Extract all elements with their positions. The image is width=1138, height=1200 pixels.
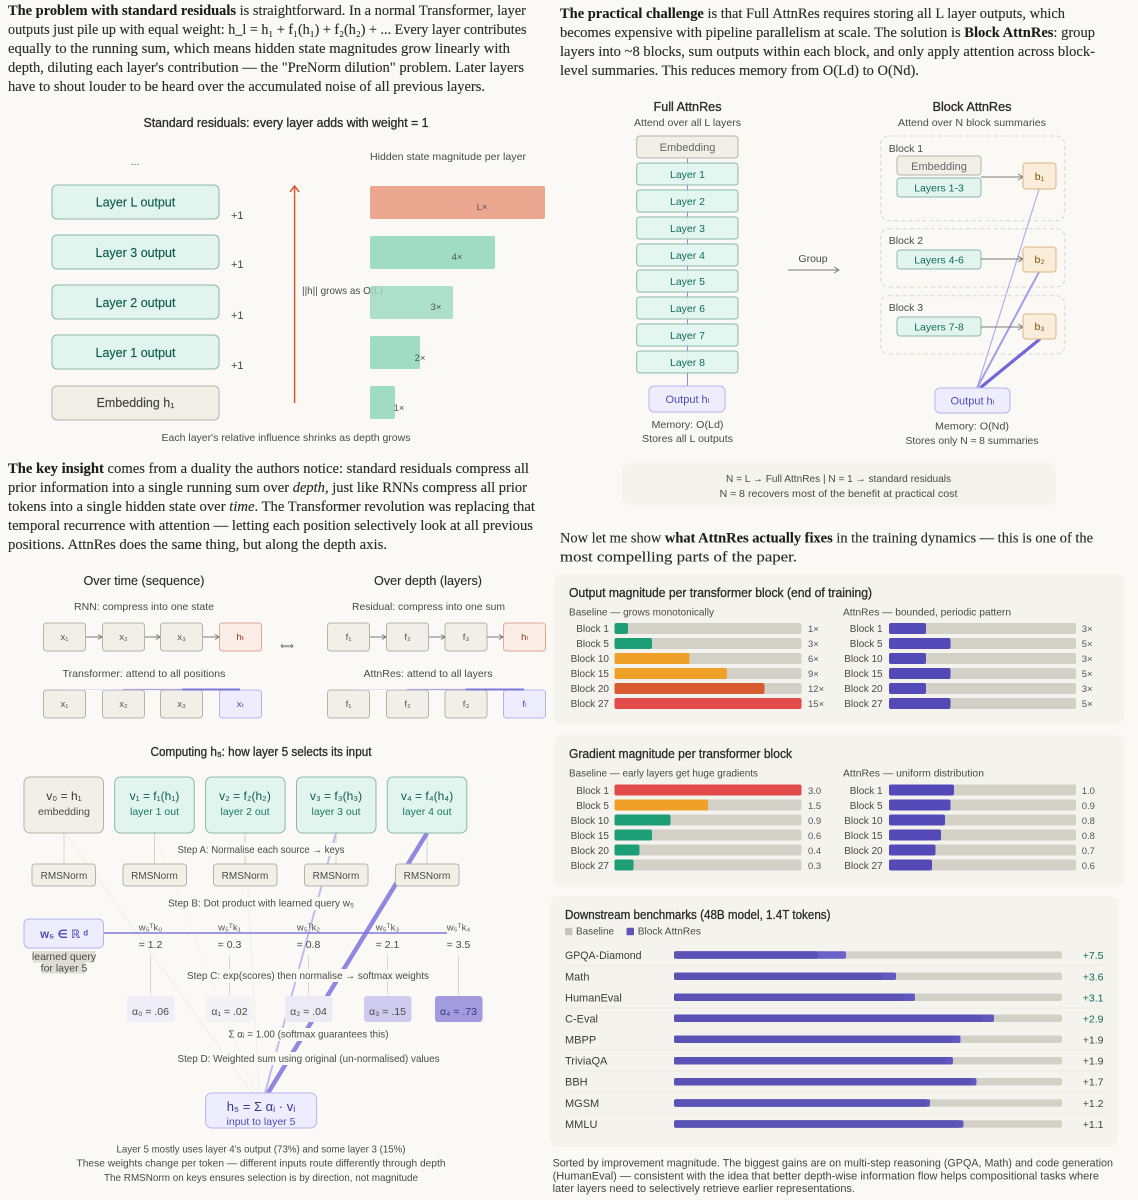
layer column: Layer 2 — [670, 196, 705, 208]
legend — [565, 926, 701, 938]
arrow: growth — [290, 186, 299, 403]
bar chart: attnres output: 5× — [1082, 639, 1093, 650]
text block: practical challenge: The practical challenge is that Full AttnRes requires storing all L layer outputs, which — [560, 6, 1066, 22]
attention lines — [977, 189, 1040, 388]
bar chart: benchmark rows: Math — [565, 971, 589, 983]
softmax weights: α₃ = .15 — [369, 1006, 406, 1018]
text block: benchmark commentary — [553, 1158, 1113, 1195]
dot product scores: w₅ᵀk₃ — [375, 922, 399, 934]
bar chart: attnres gradient: 1.0 — [1082, 786, 1095, 797]
source boxes — [24, 777, 467, 833]
dot product scores: = 3.5 — [447, 939, 470, 951]
bar chart: attnres gradient: Block 10 — [844, 816, 883, 827]
layer column: Embedding — [660, 142, 715, 154]
block labels: Block 3 — [889, 302, 923, 314]
block contents: Embedding — [911, 161, 967, 173]
bar chart: benchmark rows: GPQA-Diamond — [565, 950, 642, 962]
bar chart: baseline output: 12× — [808, 684, 824, 695]
text block: problem with standard residuals: have to shout louder to be heard over the accumulated noise of all previous layers. — [8, 79, 485, 95]
bar chart: magnitude: 1× — [394, 403, 404, 414]
RNN row: RNN: compress into one state — [74, 601, 214, 613]
dot product scores: = 2.1 — [376, 939, 399, 951]
heading: computing h5: Computing h₅: how layer 5 selects its input — [150, 745, 372, 759]
RMSNorm boxes: RMSNorm — [313, 871, 359, 882]
text block: key insight — [8, 461, 535, 553]
panel: gradient magnitude — [554, 735, 1124, 887]
panel: over time vs over depth — [44, 574, 546, 718]
bar chart: attnres output — [844, 623, 1093, 710]
layer stack — [52, 185, 219, 420]
attnres row: AttnRes: attend to all layers — [364, 668, 492, 680]
softmax weights: α₀ = .06 — [132, 1006, 169, 1018]
source boxes: embedding — [38, 806, 90, 818]
block labels: Block 2 — [889, 235, 923, 247]
panel: downstream benchmarks — [550, 896, 1118, 1147]
dot product scores: w₅ᵀk₁ — [217, 922, 241, 934]
layer stack: Layer 1 output — [96, 346, 176, 360]
bar chart: attnres gradient — [844, 784, 1095, 872]
step D label: Step D: Weighted sum using original (un-normalised) values — [178, 1053, 440, 1065]
transformer row: xₜ — [237, 699, 244, 710]
RMSNorm boxes: RMSNorm — [222, 871, 268, 882]
bar chart: attnres gradient: Block 1 — [850, 786, 883, 797]
ellipsis: ... — [131, 156, 139, 168]
layer column: Layer 4 — [670, 250, 705, 262]
weight labels: +1 — [231, 210, 244, 222]
bar chart: attnres output: Block 5 — [850, 639, 883, 650]
legend: Block AttnRes — [638, 926, 701, 938]
bar chart: baseline gradient: Block 15 — [571, 831, 609, 842]
text block: key insight: The key insight comes from a duality the authors notice: standard residuals compress all — [8, 461, 529, 477]
summary arrows — [981, 174, 1023, 330]
layer column: Layer 7 — [670, 330, 705, 342]
output box: Output hₗ — [950, 396, 995, 408]
text block: practical challenge: becomes expensive with pipeline parallelism at scale. The solution is Block AttnRes: group — [560, 25, 1095, 41]
bar chart: baseline gradient: 0.6 — [808, 831, 821, 842]
summary boxes: b₂ — [1035, 254, 1044, 266]
text block: practical challenge: layers into ~8 blocks, sum outputs within each block, and only apply attention across block- — [560, 44, 1095, 60]
callout: N trade-off: N = L → Full AttnRes | N = 1 → standard residuals — [726, 473, 951, 485]
text block: benchmark commentary: later layers need to selectively retrieve earlier representations. — [553, 1183, 855, 1195]
memory note: Memory: O(Ld) — [652, 419, 724, 431]
bar chart: baseline gradient: Block 27 — [571, 861, 609, 872]
transformer row — [44, 668, 262, 718]
subheading: attnres: AttnRes — bounded, periodic pattern — [843, 606, 1011, 618]
source boxes: layer 4 out — [402, 806, 452, 818]
dot product scores — [138, 922, 470, 951]
heading: full attnres: Full AttnRes — [654, 100, 722, 114]
bar chart: benchmark rows: BBH — [565, 1077, 588, 1089]
learned query box: learned query — [32, 951, 97, 963]
weight labels: +1 — [231, 259, 244, 271]
summary boxes: b₃ — [1034, 321, 1045, 333]
learned query box: w₅ ∈ ℝ ᵈ — [39, 929, 88, 941]
softmax weights — [127, 996, 482, 1022]
heading: output magnitude: Output magnitude per transformer block (end of training) — [569, 586, 872, 600]
bar chart: magnitude: 4× — [452, 252, 462, 263]
source boxes: v₄ = f₄(h₄) — [401, 789, 453, 803]
bar chart: baseline gradient: 3.0 — [808, 786, 821, 797]
bar chart: baseline output: Block 27 — [571, 699, 609, 710]
block contents — [897, 156, 981, 336]
text block: problem with standard residuals: depth, diluting each layer's contribution — the "PreNorm dilution" problem. Later layers — [8, 60, 524, 76]
bar chart: benchmark rows: +7.5 — [1083, 950, 1104, 962]
bar chart: baseline output: Block 1 — [576, 624, 609, 635]
bar chart: baseline output: Block 20 — [571, 684, 609, 695]
bar chart: benchmark rows: +1.2 — [1083, 1098, 1104, 1110]
bar chart: baseline gradient: 0.3 — [808, 861, 821, 872]
subheading: Attend over all L layers — [634, 117, 741, 129]
layer column: Layer 6 — [670, 303, 705, 315]
bar chart: benchmark rows: +1.9 — [1083, 1056, 1104, 1068]
bar chart: baseline gradient: 0.9 — [808, 816, 821, 827]
dot product scores: = 0.3 — [218, 939, 241, 951]
attnres row: f₃ — [463, 699, 469, 710]
sum note: Σ αᵢ = 1.00 (softmax guarantees this) — [228, 1028, 388, 1040]
bar chart: benchmark rows — [565, 950, 1104, 1131]
block contents: Layers 4-6 — [914, 254, 964, 266]
residual row: hₗ — [521, 632, 528, 643]
memory note — [642, 419, 733, 445]
residual row: f₁ — [346, 632, 351, 643]
text block: problem with standard residuals: equally to the running sum, which means hidden state magnitudes grow linearly with — [8, 41, 511, 57]
callout: N trade-off: N ≈ 8 recovers most of the benefit at practical cost — [720, 488, 958, 500]
transformer row: x₁ — [61, 699, 68, 710]
bar chart: attnres output: 5× — [1082, 699, 1093, 710]
output h5 box: h₅ = Σ αᵢ · vᵢ — [227, 1099, 295, 1114]
output box — [649, 386, 725, 412]
bar chart: baseline output: 6× — [808, 654, 819, 665]
bar chart: benchmark rows: +1.9 — [1083, 1034, 1104, 1046]
softmax weights: α₁ = .02 — [211, 1006, 248, 1018]
summary boxes: b₁ — [1035, 171, 1045, 183]
source boxes: v₂ = f₂(h₂) — [219, 789, 271, 803]
bar chart: attnres gradient: Block 20 — [844, 846, 883, 857]
bar chart: attnres output: Block 15 — [844, 669, 883, 680]
arrow: group — [788, 253, 839, 273]
layer stack: Embedding h₁ — [97, 396, 174, 410]
heading: standard residuals: Standard residuals: every layer adds with weight = 1 — [144, 116, 429, 130]
dot product scores: w₅ᵀk₂ — [296, 922, 320, 934]
RNN row: hₜ — [236, 632, 245, 643]
callout: N trade-off — [622, 463, 1056, 505]
transformer row: x₃ — [177, 699, 186, 710]
dot product scores: = 0.8 — [297, 939, 320, 951]
text block: problem with standard residuals — [8, 3, 527, 95]
bar chart: baseline gradient: Block 20 — [571, 846, 609, 857]
text block: problem with standard residuals: The problem with standard residuals is straightforward. In a normal Transformer, layer — [8, 3, 526, 19]
bar chart: benchmark rows: +1.1 — [1083, 1119, 1104, 1131]
text block: key insight: tokens into a single hidden state over time. The Transformer revolution was replacing that — [8, 499, 535, 515]
text block: training dynamics intro — [560, 530, 1093, 566]
summary boxes — [1023, 163, 1056, 339]
bar chart: benchmark rows: +3.1 — [1083, 992, 1104, 1004]
label: growth rate: ||h|| grows as O(L) — [302, 285, 383, 297]
bar chart: attnres gradient: Block 15 — [844, 831, 883, 842]
bar chart: baseline gradient: 1.5 — [808, 801, 821, 812]
chart heading: hidden state magnitude: Hidden state magnitude per layer — [370, 151, 526, 163]
step B label: Step B: Dot product with learned query w₅ — [168, 898, 354, 910]
dot product scores: w₅ᵀk₄ — [446, 922, 470, 934]
bar chart: magnitude — [370, 186, 545, 419]
bar chart: attnres gradient: Block 5 — [850, 801, 883, 812]
weight labels: +1 — [231, 360, 244, 372]
bar chart: baseline output: Block 5 — [576, 639, 609, 650]
RNN row: x₁ — [61, 632, 68, 643]
text block: benchmark commentary: (HumanEval) — consistent with the idea that better depth-wise information flow helps compositional tasks where — [553, 1170, 1099, 1182]
attnres row: fₗ — [522, 699, 527, 710]
bar chart: attnres output: Block 10 — [844, 654, 883, 665]
row separators — [565, 966, 1103, 1114]
footnote: The RMSNorm on keys ensures selection is by direction, not magnitude — [104, 1172, 418, 1184]
text block: practical challenge: level summaries. This reduces memory from O(Ld) to O(Nd). — [560, 63, 919, 79]
RMSNorm boxes: RMSNorm — [131, 871, 178, 882]
footnote: These weights change per token — different inputs route differently through depth — [76, 1158, 446, 1170]
softmax weights: α₄ = .73 — [440, 1006, 477, 1018]
bar chart: baseline gradient: 0.4 — [808, 846, 821, 857]
flow lines — [64, 833, 458, 1093]
source boxes: v₃ = f₃(h₃) — [310, 789, 362, 803]
heading: over depth: Over depth (layers) — [374, 574, 482, 588]
layer stack: Layer 3 output — [96, 246, 176, 260]
heading: over time: Over time (sequence) — [84, 574, 204, 588]
step C label: Step C: exp(scores) then normalise → softmax weights — [187, 970, 429, 982]
text block: training dynamics intro: most compelling parts of the paper. — [560, 550, 797, 566]
RNN row: x₂ — [119, 632, 128, 643]
heading: benchmarks: Downstream benchmarks (48B model, 1.4T tokens) — [565, 908, 830, 922]
attnres row: f₁ — [346, 699, 351, 710]
bar chart: attnres gradient: 0.9 — [1082, 801, 1095, 812]
source boxes: layer 3 out — [311, 806, 361, 818]
bar chart: attnres output: Block 1 — [850, 624, 883, 635]
attnres row — [328, 668, 546, 718]
bar chart: magnitude: L× — [477, 202, 487, 213]
block contents: Layers 7-8 — [914, 322, 964, 334]
text block: problem with standard residuals: outputs just pile up with equal weight: h_l = h₁ + f₁(h₁) + f₂(h₂) + ... Every layer contributes — [8, 22, 527, 38]
bar chart: baseline output — [571, 623, 824, 710]
transformer row: x₂ — [119, 699, 128, 710]
RMSNorm boxes: RMSNorm — [41, 871, 87, 882]
bar chart: benchmark rows: C-Eval — [565, 1013, 598, 1025]
memory note: Stores all L outputs — [642, 433, 733, 445]
text block: training dynamics intro: Now let me show what AttnRes actually fixes in the training dynamics — this is one of the — [560, 530, 1093, 546]
bar chart: baseline output: Block 15 — [571, 669, 609, 680]
bar chart: attnres gradient: 0.8 — [1082, 831, 1095, 842]
dashed block groups — [881, 136, 1065, 354]
query line — [104, 932, 447, 934]
softmax weights: α₂ = .04 — [290, 1006, 327, 1018]
text block: key insight: temporal recurrence with attention — letting each position selectively look at all previous — [8, 518, 533, 534]
panel: computing h5 — [24, 745, 482, 1184]
residual row: f₃ — [463, 632, 469, 643]
bar chart: magnitude: 2× — [415, 353, 425, 364]
source boxes: layer 2 out — [220, 806, 270, 818]
panel: full attnres — [634, 100, 741, 445]
RMSNorm boxes: RMSNorm — [404, 871, 450, 882]
subheading: Attend over N block summaries — [898, 117, 1046, 129]
source boxes: v₁ = f₁(h₁) — [130, 789, 179, 803]
panel: output magnitude — [554, 574, 1124, 724]
subheading: baseline: Baseline — grows monotonically — [569, 606, 715, 618]
bar chart: benchmark rows: TriviaQA — [565, 1056, 608, 1068]
dot product scores: = 1.2 — [139, 939, 162, 951]
residual row: f₂ — [404, 632, 411, 643]
caption: Each layer's relative influence shrinks as depth grows — [162, 432, 410, 444]
block labels: Block 1 — [889, 143, 923, 155]
bar chart: benchmark rows: MMLU — [565, 1119, 597, 1131]
bar chart: attnres gradient: 0.8 — [1082, 816, 1095, 827]
bar chart: baseline output: 9× — [808, 669, 819, 680]
layer stack: Layer 2 output — [96, 296, 176, 310]
bar chart: baseline output: 1× — [808, 624, 819, 635]
text block: key insight: prior information into a single running sum over depth, just like RNNs compress all prior — [8, 480, 527, 496]
bar chart: attnres gradient: 0.7 — [1082, 846, 1095, 857]
bar chart: baseline output: 3× — [808, 639, 819, 650]
footnote: Layer 5 mostly uses layer 4's output (73%) and some layer 3 (15%) — [116, 1144, 406, 1156]
RNN row — [44, 601, 262, 651]
legend: Baseline — [576, 926, 614, 938]
layer column — [637, 136, 738, 386]
bar chart: attnres output: 3× — [1082, 684, 1093, 695]
learned query box — [24, 919, 104, 974]
bar chart: baseline gradient: Block 10 — [571, 816, 609, 827]
learned query box: for layer 5 — [41, 962, 88, 974]
bar chart: attnres gradient: 0.6 — [1082, 861, 1095, 872]
weight labels — [231, 210, 244, 372]
residual row: Residual: compress into one sum — [352, 601, 505, 613]
source boxes: v₀ = h₁ — [46, 789, 82, 803]
dot product scores: w₅ᵀk₀ — [138, 922, 162, 934]
memory note — [906, 420, 1038, 447]
output h5 box — [206, 1093, 317, 1128]
weight labels: +1 — [231, 310, 244, 322]
panel: block attnres — [881, 100, 1065, 447]
panel: standard residuals diagram — [52, 116, 545, 444]
RNN row: x₃ — [177, 632, 186, 643]
text block: key insight: positions. AttnRes does the same thing, but along the depth axis. — [8, 537, 387, 553]
output box: Output hₗ — [665, 394, 710, 406]
block contents: Layers 1-3 — [914, 182, 964, 194]
layer column: Layer 3 — [670, 223, 705, 235]
heading: block attnres: Block AttnRes — [932, 100, 1012, 114]
transformer row: Transformer: attend to all positions — [62, 668, 226, 680]
RMSNorm boxes — [32, 864, 459, 886]
memory note: Stores only N ≈ 8 summaries — [906, 435, 1038, 447]
bar chart: attnres gradient: Block 27 — [844, 861, 883, 872]
output h5 box: input to layer 5 — [227, 1116, 296, 1128]
bar chart: benchmark rows: +1.7 — [1083, 1077, 1104, 1089]
footnote — [76, 1144, 446, 1184]
bar chart: attnres output: Block 27 — [844, 699, 883, 710]
bar chart: benchmark rows: HumanEval — [565, 992, 622, 1004]
text block: benchmark commentary: Sorted by improvement magnitude. The biggest gains are on multi-step reasoning (GPQA, Math) and code generation — [553, 1158, 1113, 1170]
bar chart: benchmark rows: MGSM — [565, 1098, 599, 1110]
bar chart: baseline gradient: Block 1 — [576, 786, 609, 797]
equivalence symbol: ⟺ — [280, 641, 294, 652]
layer column: Layer 5 — [670, 276, 705, 288]
bar chart: attnres output: 3× — [1082, 654, 1093, 665]
source boxes: layer 1 out — [130, 806, 179, 818]
bar chart: magnitude: 3× — [431, 302, 441, 313]
layer column: Layer 1 — [670, 169, 705, 181]
heading: gradient magnitude: Gradient magnitude per transformer block — [569, 747, 793, 761]
bar chart: baseline gradient — [571, 784, 821, 872]
bar chart: benchmark rows: MBPP — [565, 1034, 596, 1046]
bar chart: attnres output: 5× — [1082, 669, 1093, 680]
subheading: baseline: Baseline — early layers get huge gradients — [569, 768, 758, 780]
layer column: Layer 8 — [670, 357, 705, 369]
bar chart: attnres output: 3× — [1082, 624, 1093, 635]
output box — [935, 388, 1010, 413]
arrow: group: Group — [798, 253, 828, 265]
step A label: Step A: Normalise each source → keys — [178, 844, 344, 856]
bar chart: baseline output: Block 10 — [571, 654, 609, 665]
bar chart: attnres output: Block 20 — [844, 684, 883, 695]
residual row — [328, 601, 546, 651]
block labels — [889, 143, 923, 314]
subheading: attnres: AttnRes — uniform distribution — [843, 768, 984, 780]
attnres row: f₂ — [404, 699, 411, 710]
memory note: Memory: O(Nd) — [935, 420, 1009, 432]
bar chart: benchmark rows: +3.6 — [1083, 971, 1104, 983]
bar chart: baseline gradient: Block 5 — [576, 801, 609, 812]
bar chart: baseline output: 15× — [808, 699, 824, 710]
bar chart: benchmark rows: +2.9 — [1083, 1013, 1104, 1025]
layer stack: Layer L output — [96, 196, 176, 210]
text block: practical challenge — [560, 6, 1095, 79]
